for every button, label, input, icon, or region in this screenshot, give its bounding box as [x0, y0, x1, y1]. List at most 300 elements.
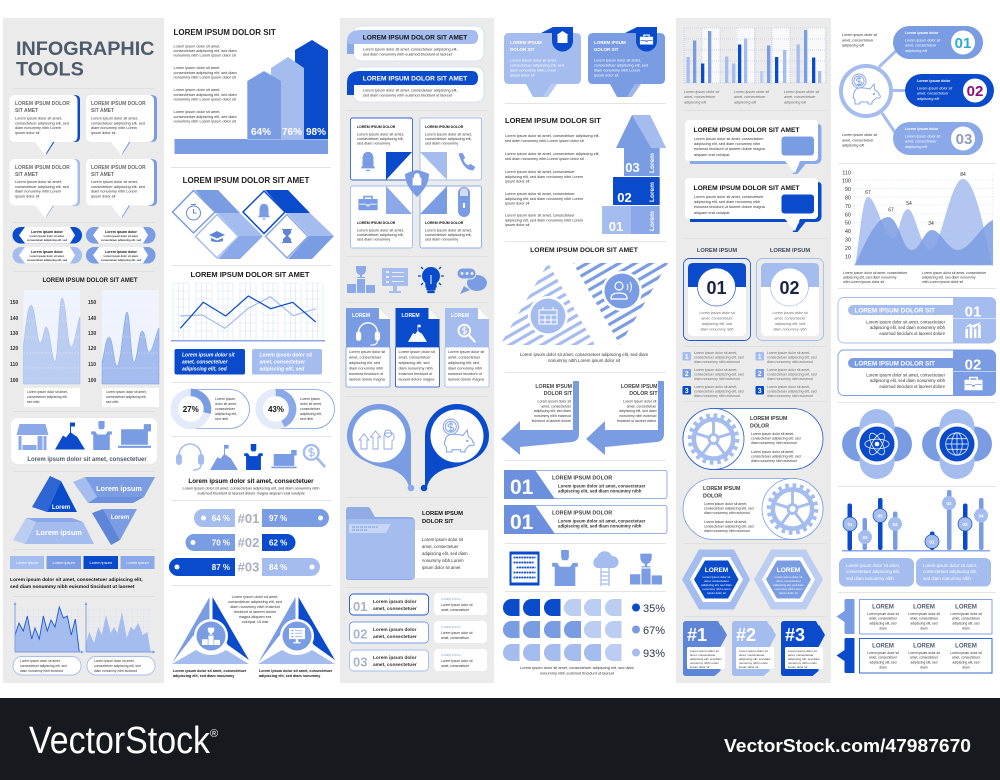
tag card #2 — [732, 621, 776, 676]
overlapping area chart: 100 — [842, 178, 851, 184]
info bubble 2: Lorem ipsum dolor sit amet, — [594, 58, 641, 62]
feature box 01: LOREM IPSUM DOLOR SIT — [854, 308, 935, 314]
overlapping area chart: adipiscing elit, sed diam nonummy — [843, 276, 897, 280]
arrow pills: Lorem ipsum dolor — [31, 230, 63, 234]
speech bubble 3 — [10, 159, 80, 218]
donut 43%: consectetuer — [300, 407, 321, 411]
info bubble 2: LOREM IPSUM — [594, 40, 626, 45]
panel top left: Lorem ipsum dolor sit amet, — [357, 132, 404, 136]
lorem table 2: diam — [879, 666, 887, 670]
node 03: amet, consectetuer — [905, 140, 937, 144]
callout dark: Lorem ipsum dolor sit amet, consectetuer — [694, 195, 764, 199]
tag card #1: ipsum dolor sit — [690, 665, 710, 669]
3D pyramid segments — [13, 476, 155, 545]
row 01 — [350, 593, 487, 615]
icon row — [510, 550, 662, 586]
icon: speaker — [552, 550, 578, 586]
info bubble 1: LOREM IPSUM — [510, 40, 542, 45]
speech bubble 2: ipsum dolor sit — [91, 131, 116, 135]
hexagon 2: ipsum dolor sit — [779, 591, 798, 595]
chart captions: consectetuer adipiscing elit, sed — [20, 664, 67, 668]
numbered banner 2: Lorem ipsum dolor sit amet, consectetuer — [558, 518, 646, 524]
slider captions: sed diam nonummy nibh — [923, 576, 971, 581]
icon: trophy podium — [630, 554, 662, 584]
numbered list: consectetuer adipiscing elit, sed — [767, 356, 817, 360]
area chart right: consectetuer adipiscing elit, — [106, 395, 147, 399]
speech bubble 1: Lorem ipsum dolor sit amet, — [15, 116, 62, 120]
callout light: Lorem ipsum dolor sit amet, consectetuer — [694, 137, 764, 141]
speech bubble 1: consectetuer adipiscing elit, sed — [15, 122, 69, 126]
body text — [174, 44, 237, 124]
document 3: Lorem ipsum dolor sit — [448, 350, 485, 354]
document 2: amet, consectetuer — [398, 356, 432, 360]
triangle note: consectetuer adipiscing elit, sed — [228, 600, 282, 604]
numbered banner 1 — [504, 470, 667, 499]
gear pill 2: diam nonummy nibh euismod — [704, 529, 750, 533]
comparison bars: 70 % — [212, 538, 230, 548]
row 93%: 93% — [643, 648, 665, 660]
overlapping area chart: 50 — [845, 220, 851, 226]
overlapping area chart: 67 — [888, 208, 894, 214]
info bubble 1: DOLOR SIT — [510, 47, 535, 52]
arrow pills: Lorem ipsum dolor — [105, 230, 137, 234]
overlapping area chart: 110 — [842, 170, 851, 176]
arrow callout 2 — [586, 381, 664, 455]
node 01: amet, consectetuer — [905, 44, 937, 48]
lorem table 1: amet, consectetuer — [910, 616, 939, 620]
list text: Lorem ipsum dolor sit amet, consectetuer — [505, 214, 575, 218]
icon: stopwatch diamond — [172, 190, 215, 233]
folder: LOREM IPSUM — [422, 511, 463, 517]
banner dark: sed diam nonummy nibh euismod tincidunt ut laoreet — [363, 94, 453, 98]
arrow pills: Lorem ipsum dolor sit amet, — [104, 254, 139, 258]
triangle diagram left — [172, 597, 249, 664]
arrow pills: Lorem ipsum dolor — [105, 250, 137, 254]
tag card #3: ipsum dolor sit — [788, 665, 808, 669]
body text: consectetuer adipiscing elit, sed diam — [174, 49, 237, 53]
overlapping area chart: 54 — [906, 201, 912, 207]
list text: adipiscing elit, sed diam nonummy nibh Lorem — [505, 218, 583, 222]
comparison bars: 97 % — [269, 514, 287, 523]
area chart right: 130 — [88, 331, 97, 337]
hub notes: adipiscing elit — [842, 144, 865, 148]
panel bottom left: LOREM IPSUM DOLOR — [357, 221, 396, 225]
bar chart: adipiscing elit — [784, 100, 807, 104]
hexagon 2: Lorem ipsum dolor sit — [775, 575, 803, 579]
speech bubble 2 — [86, 95, 157, 155]
numbered list: 3 — [758, 388, 762, 395]
lorem table 1: diam — [879, 626, 887, 630]
footer band — [0, 698, 1000, 780]
chart caption: Lorem ipsum dolor sit amet, consectetuer adipiscing elit, sed diam — [520, 665, 634, 670]
hexagon 2: amet, consectetuer — [776, 579, 801, 583]
numbered banner 1: LOREM IPSUM DOLOR — [552, 476, 612, 482]
row 02 — [350, 621, 487, 643]
slider captions — [839, 558, 991, 586]
numbered banner 1: 01 — [510, 476, 534, 499]
info bubble 2 — [588, 27, 665, 97]
lorem table 2: Lorem ipsum dolor sit — [867, 651, 899, 655]
chart captions: Lorem ipsum dolor sit amet, — [20, 659, 61, 663]
staircase arrow: 02 — [617, 190, 632, 205]
speech bubble 2: consectetuer adipiscing elit, sed — [91, 122, 145, 126]
node 03 — [893, 122, 983, 155]
striped triangles — [500, 263, 668, 345]
folder: ipsum dolor sit amet — [422, 565, 461, 570]
numbered list: Lorem ipsum dolor sit amet, — [694, 351, 737, 355]
triangle caption: Lorem ipsum dolor sit amet, consectetuer adipiscing elit, sed diam — [520, 352, 649, 357]
numbered banner 1: adipiscing elit, sed diam nonummy nibh — [558, 488, 642, 494]
lorem table 2: amet, consectetuer — [910, 656, 939, 660]
chart caption: nonummy nibh euismod tincidunt ut laoreet — [540, 670, 615, 676]
gear pill 1: Lorem ipsum dolor sit amet, — [751, 432, 794, 436]
row 01: amet, consectetuer — [441, 608, 470, 612]
gear pill 2: diam nonummy nibh euismod — [704, 511, 750, 515]
lorem table 1: adipiscing elit, sed — [870, 622, 897, 626]
feature box 02: adipiscing elit, sed diam nonummy nibh — [870, 378, 946, 383]
footer logo: VectorStock — [29, 720, 211, 762]
slider chart — [842, 490, 990, 552]
row 35%: 35% — [643, 603, 665, 615]
feature box 01: euismod tincidunt ut laoreet dolore — [879, 331, 946, 336]
overlapping area chart: 40 — [845, 229, 851, 235]
folder: amet, consectetuer — [422, 544, 459, 549]
panel bottom right: consectetuer adipiscing elit, — [425, 233, 472, 237]
numbered list: 2 — [758, 371, 762, 378]
icon card — [11, 418, 157, 464]
speech bubble 4: Lorem ipsum dolor sit amet, — [91, 180, 138, 184]
feature box 01: Lorem ipsum dolor sit amet, consectetuer — [866, 320, 946, 324]
icon: mountain — [210, 445, 238, 470]
hub notes — [842, 33, 878, 148]
lorem table 1: Lorem ipsum dolor sit — [950, 612, 982, 616]
panel bottom right: LOREM IPSUM DOLOR — [425, 221, 464, 225]
heading: LOREM IPSUM DOLOR SIT AMET — [191, 270, 310, 279]
row 03: Lorem ipsum dolor — [373, 655, 417, 661]
tag card #2: Lorem ipsum dolor sit — [739, 649, 768, 653]
triangle note: diam nonummy nibh euismod — [230, 605, 280, 609]
list text: sed diam nonummy nibh.Lorem ipsum dolor sit — [505, 139, 585, 143]
column 2 — [164, 18, 340, 683]
document 2: euismod tincidunt ut — [398, 372, 433, 376]
donut 43%: 43% — [268, 405, 284, 414]
text block — [183, 478, 319, 496]
donut 27%: consectetuer — [215, 407, 236, 411]
triangle captions: adipiscing elit, sed diam nonummy — [259, 674, 321, 678]
document 2: adipiscing elit, sed — [398, 361, 430, 365]
area chart left: 130 — [10, 331, 19, 337]
text boxes: Lorem ipsum dolor sit — [182, 352, 235, 358]
document 2: laoreet dolore magna — [398, 378, 435, 382]
slider captions: sed diam nonummy nibh — [846, 576, 894, 581]
flower atom — [842, 409, 912, 479]
title: INFOGRAPHIC — [16, 38, 154, 60]
comparison bars: #02 — [238, 535, 259, 550]
numbered card 02: 02 — [779, 278, 800, 298]
folder: nonummy nibh.Lorem — [422, 558, 464, 563]
feature box 02 — [838, 350, 996, 396]
text boxes: adipiscing elit, sed — [260, 366, 305, 372]
numbered list: Lorem ipsum dolor sit amet, — [694, 368, 737, 372]
icon: hourglass diamond — [266, 214, 308, 258]
overlapping area chart: 80 — [845, 196, 851, 202]
info bubble 1: ipsum dolor sit — [510, 74, 535, 78]
row 01: 01 — [353, 599, 367, 614]
panel bottom right — [420, 186, 482, 248]
title: TOOLS — [16, 58, 84, 80]
area chart right: 100 — [88, 378, 97, 384]
numbered card 01: amet, consectetuer — [701, 316, 733, 320]
node 03: Lorem ipsum dolor — [905, 127, 939, 131]
numbered banner 2: 01 — [510, 511, 534, 534]
numbered list: 1 — [685, 354, 689, 361]
node 02: adipiscing elit — [917, 97, 940, 101]
hub notes: amet, consectetuer — [842, 138, 874, 142]
info bubble 2: consectetuer adipiscing elit, sed — [594, 64, 648, 68]
speech bubble 3: SIT AMET — [15, 172, 38, 178]
row 01: Lorem ipsum dolor — [373, 599, 417, 605]
title — [16, 38, 154, 80]
icon: shield lock — [405, 170, 429, 197]
triangle note: volutpat. Ut wisi — [242, 620, 268, 624]
info bubble 1: Lorem ipsum dolor sit amet, — [510, 58, 557, 62]
hub diagram — [841, 26, 994, 155]
gear pill 2: Lorem ipsum dolor sit amet, — [704, 502, 747, 506]
triangle note: magna aliquam era — [239, 615, 272, 619]
row 35% — [503, 599, 665, 616]
callout dark — [685, 178, 822, 232]
column 3 — [340, 18, 494, 683]
lorem table 2: amet, consectetuer — [869, 656, 898, 660]
arrow callout 2: adipiscing elit, sed diam — [619, 409, 657, 413]
gear pill 1: diam nonummy nibh euismod — [751, 441, 797, 445]
row 02: Lorem ipsum dolor sit — [441, 631, 473, 635]
triangle note: tincidunt ut laoreet dolore — [234, 610, 276, 614]
numbered list: Lorem ipsum dolor sit amet, — [694, 385, 737, 389]
area chart right: sed nibh — [106, 400, 119, 404]
row 01: amet, consectetuer — [373, 606, 417, 612]
lorem table 2: LOREM — [955, 644, 977, 650]
numbered list: diam nonummy nibh euismod — [767, 377, 813, 381]
label buttons: Lorem ipsum — [126, 560, 149, 565]
arrow callout 2: amet, consectetuer — [627, 404, 657, 408]
row 02: 02 — [353, 626, 367, 642]
info bubble 1: diam nonummy nibh.Lorem — [510, 68, 556, 72]
body text: consectetuer adipiscing elit, sed diam — [174, 93, 237, 97]
document 3: laoreet dolore magna — [448, 378, 485, 382]
arrow pills: Lorem ipsum dolor — [31, 250, 63, 254]
flower globe — [922, 409, 992, 479]
panel top right: sed diam nonummy — [425, 142, 458, 146]
speech bubble 1: SIT AMET — [15, 108, 38, 114]
area chart left: sed nibh — [27, 400, 40, 404]
arrow pills: consectetuer adipiscing elit, sed — [101, 258, 141, 262]
numbered list: 1 — [758, 354, 762, 361]
triangle captions: Lorem ipsum dolor sit amet, consectetuer — [259, 669, 333, 673]
tag card #1: adipiscing elit, sed diam — [690, 657, 722, 661]
numbered card 02: diam nonummy nibh — [773, 328, 807, 332]
row 02: LOREM IPSUM — [441, 625, 461, 629]
icon: calendar — [528, 296, 568, 336]
comparison bars: 62 % — [269, 538, 287, 548]
feature box 01: 01 — [965, 304, 981, 320]
numbered list: diam nonummy nibh euismod — [694, 394, 740, 398]
tag card #2: #2 — [736, 625, 756, 645]
panel top left: LOREM IPSUM DOLOR — [357, 125, 396, 129]
icon row — [347, 266, 487, 294]
arrow callout 2: nonummy nibh euismod — [619, 414, 657, 418]
area chart right — [88, 290, 159, 407]
text boxes — [174, 349, 322, 374]
list text: ipsum dolor sit — [505, 202, 530, 206]
banner dark — [347, 67, 484, 102]
node 01 — [893, 26, 983, 59]
security quad — [350, 118, 482, 248]
document 1: adipiscing elit, sed — [349, 361, 380, 365]
numbered list: consectetuer adipiscing elit, sed — [694, 356, 744, 360]
numbered card 02: Lorem ipsum dolor sit — [772, 311, 809, 315]
lorem table 1: adipiscing elit, sed — [911, 622, 938, 626]
speech bubble 2: SIT AMET — [91, 108, 114, 114]
panel top right: LOREM IPSUM DOLOR — [425, 125, 464, 129]
hexagon 1: ipsum dolor sit — [707, 591, 726, 595]
body text: Lorem ipsum dolor sit amet, — [174, 110, 220, 114]
icon: checklist monitor — [382, 268, 408, 293]
area charts heading: LOREM IPSUM DOLOR SIT AMET — [42, 278, 138, 284]
banner light: Lorem ipsum dolor sit amet, consectetuer adipiscing elit, — [363, 48, 458, 52]
node 02: Lorem ipsum dolor — [917, 79, 951, 83]
arrow pills: Lorem ipsum dolor sit amet, — [30, 234, 65, 238]
slider chart: 01 — [847, 522, 853, 527]
row 01: Lorem ipsum dolor sit — [441, 603, 473, 607]
lorem table 1: Lorem ipsum dolor sit — [867, 612, 899, 616]
diamond chain — [172, 190, 334, 259]
numbered card 01: adipiscing elit, sed — [702, 322, 733, 326]
icon: piggy hub — [841, 66, 891, 116]
lorem table 1: LOREM — [955, 604, 977, 610]
icon: person voice — [602, 271, 642, 311]
text block: Lorem ipsum dolor sit amet, consectetuer adipiscing elit, sed diam nonummy nibh — [183, 486, 319, 490]
lorem table 2: amet, consectetuer — [952, 656, 981, 660]
gear pill 1: LOREM IPSUM — [750, 416, 788, 422]
bar chart: Lorem ipsum dolor sit — [784, 90, 820, 94]
donut 43% — [259, 390, 334, 428]
slider chart: 03 — [962, 522, 968, 527]
triangle caption: nonummy nibh.Lorem ipsum dolor sit — [548, 358, 621, 363]
lorem table 2: diam — [920, 666, 928, 670]
speech bubble 4: diam nonummy nibh Lorem — [91, 190, 137, 194]
numbered list: diam nonummy nibh euismod — [767, 360, 813, 364]
feature box 01 — [838, 297, 996, 343]
document 3: amet, consectetuer — [448, 356, 481, 360]
list text: Lorem ipsum dolor sit amet, consectetuer adipiscing elit, — [505, 152, 600, 156]
panel bottom left: Lorem ipsum dolor sit amet, — [357, 228, 404, 232]
lorem table 1: amet, consectetuer — [869, 616, 898, 620]
slider chart: 02 — [862, 535, 868, 540]
numbered list: Lorem ipsum dolor sit amet, — [767, 351, 810, 355]
banner light: sed diam nonummy nibh euismod tincidunt ut laoreet — [363, 52, 453, 56]
slider captions: consectetuer adipiscing elit, — [846, 569, 900, 574]
document 3: adipiscing elit, sed — [448, 361, 479, 365]
lorem table 2: Lorem ipsum dolor sit — [908, 651, 940, 655]
gear pill 2: consectetuer adipiscing elit, sed — [704, 506, 754, 510]
arrow bar chart: 98% — [306, 127, 326, 138]
column 4 — [500, 27, 668, 676]
donut 27%: adipiscing elit, — [215, 412, 237, 416]
icon: headset — [176, 444, 204, 470]
3D pyramid segments: Lorem — [111, 515, 129, 521]
folder: DOLOR SIT — [422, 519, 454, 525]
footer url: VectorStock.com/47987670 — [724, 735, 971, 756]
lorem table 2 — [836, 638, 992, 673]
donut 27%: Lorem ipsum — [215, 397, 235, 401]
numbered banner 2 — [504, 505, 667, 534]
arrow pills: consectetuer adipiscing elit, sed — [101, 238, 141, 242]
numbered card 01: diam nonummy nibh — [700, 328, 734, 332]
area chart left: 100 — [10, 378, 19, 384]
icon row — [176, 444, 325, 470]
area chart left: 120 — [10, 346, 19, 352]
arrow callout 1: Lorem ipsum dolor sit — [538, 400, 571, 404]
row 03: LOREM IPSUM — [441, 653, 461, 657]
triangle captions: Lorem ipsum dolor sit amet, consectetuer — [173, 669, 247, 673]
numbered list: Lorem ipsum dolor sit amet, — [767, 385, 810, 389]
banner dark: LOREM IPSUM DOLOR SIT AMET — [363, 76, 467, 82]
chart captions: Lorem ipsum dolor sit amet, — [94, 659, 135, 663]
node 01: 01 — [955, 35, 971, 52]
overlapping area chart: nibh.Lorem ipsum dolor sit — [922, 280, 963, 284]
heading: LOREM IPSUM DOLOR SIT — [505, 116, 601, 125]
document 3: euismod tincidunt ut — [448, 372, 483, 376]
speech bubble 1: LOREM IPSUM DOLOR — [15, 101, 70, 107]
lorem table 2: Lorem ipsum dolor sit — [950, 651, 982, 655]
icon: mountain — [55, 422, 85, 450]
arrow bar chart: 76% — [282, 127, 302, 138]
overlapping area chart: 34 — [928, 221, 934, 227]
arrow callout 2: tincidunt ut laoreet dolore — [617, 419, 657, 423]
donut 43%: adipiscing elit, — [300, 412, 322, 416]
arrow callout 1 — [501, 381, 579, 455]
speech bubble 4: ipsum dolor sit — [91, 194, 116, 198]
arrow callout 1: tincidunt ut laoreet dolore — [532, 419, 571, 423]
lorem table 2: diam — [962, 666, 970, 670]
body text: consectetuer adipiscing elit, sed diam — [174, 71, 237, 75]
callout dark: euismod tincidunt ut laoreet dolore magna — [694, 205, 766, 209]
icon: magnifier — [304, 445, 325, 467]
numbered rows — [350, 593, 487, 671]
staircase arrow: Lorem — [649, 211, 656, 231]
node 02 — [905, 74, 994, 107]
overlapping area chart: Lorem ipsum dolor sit amet, consectetuer — [922, 271, 987, 275]
body text: Lorem ipsum dolor sit amet, — [174, 88, 220, 92]
overlapping area chart: Lorem ipsum dolor sit amet, consectetuer — [843, 271, 908, 275]
folder — [346, 507, 488, 580]
tag card #1 — [683, 621, 727, 676]
text boxes: Lorem ipsum dolor sit — [260, 352, 312, 358]
speech bubble 2: Lorem ipsum dolor sit amet, — [91, 116, 138, 120]
document 1: Lorem ipsum dolor sit — [349, 350, 386, 354]
slider chart: 04 — [892, 522, 898, 527]
area chart right: 140 — [88, 316, 97, 322]
feature box 02: 02 — [965, 356, 981, 374]
triangle caption — [520, 352, 649, 363]
overlapping area chart: 60 — [845, 212, 851, 218]
arrow callout 1: LOREM IPSUM — [535, 384, 572, 390]
info bubble 1: consectetuer adipiscing elit, sed — [510, 64, 564, 68]
hub notes: Lorem ipsum dolor sit — [842, 33, 878, 37]
location pin right — [421, 404, 489, 491]
node 03: Lorem ipsum dolor sit — [905, 134, 941, 138]
